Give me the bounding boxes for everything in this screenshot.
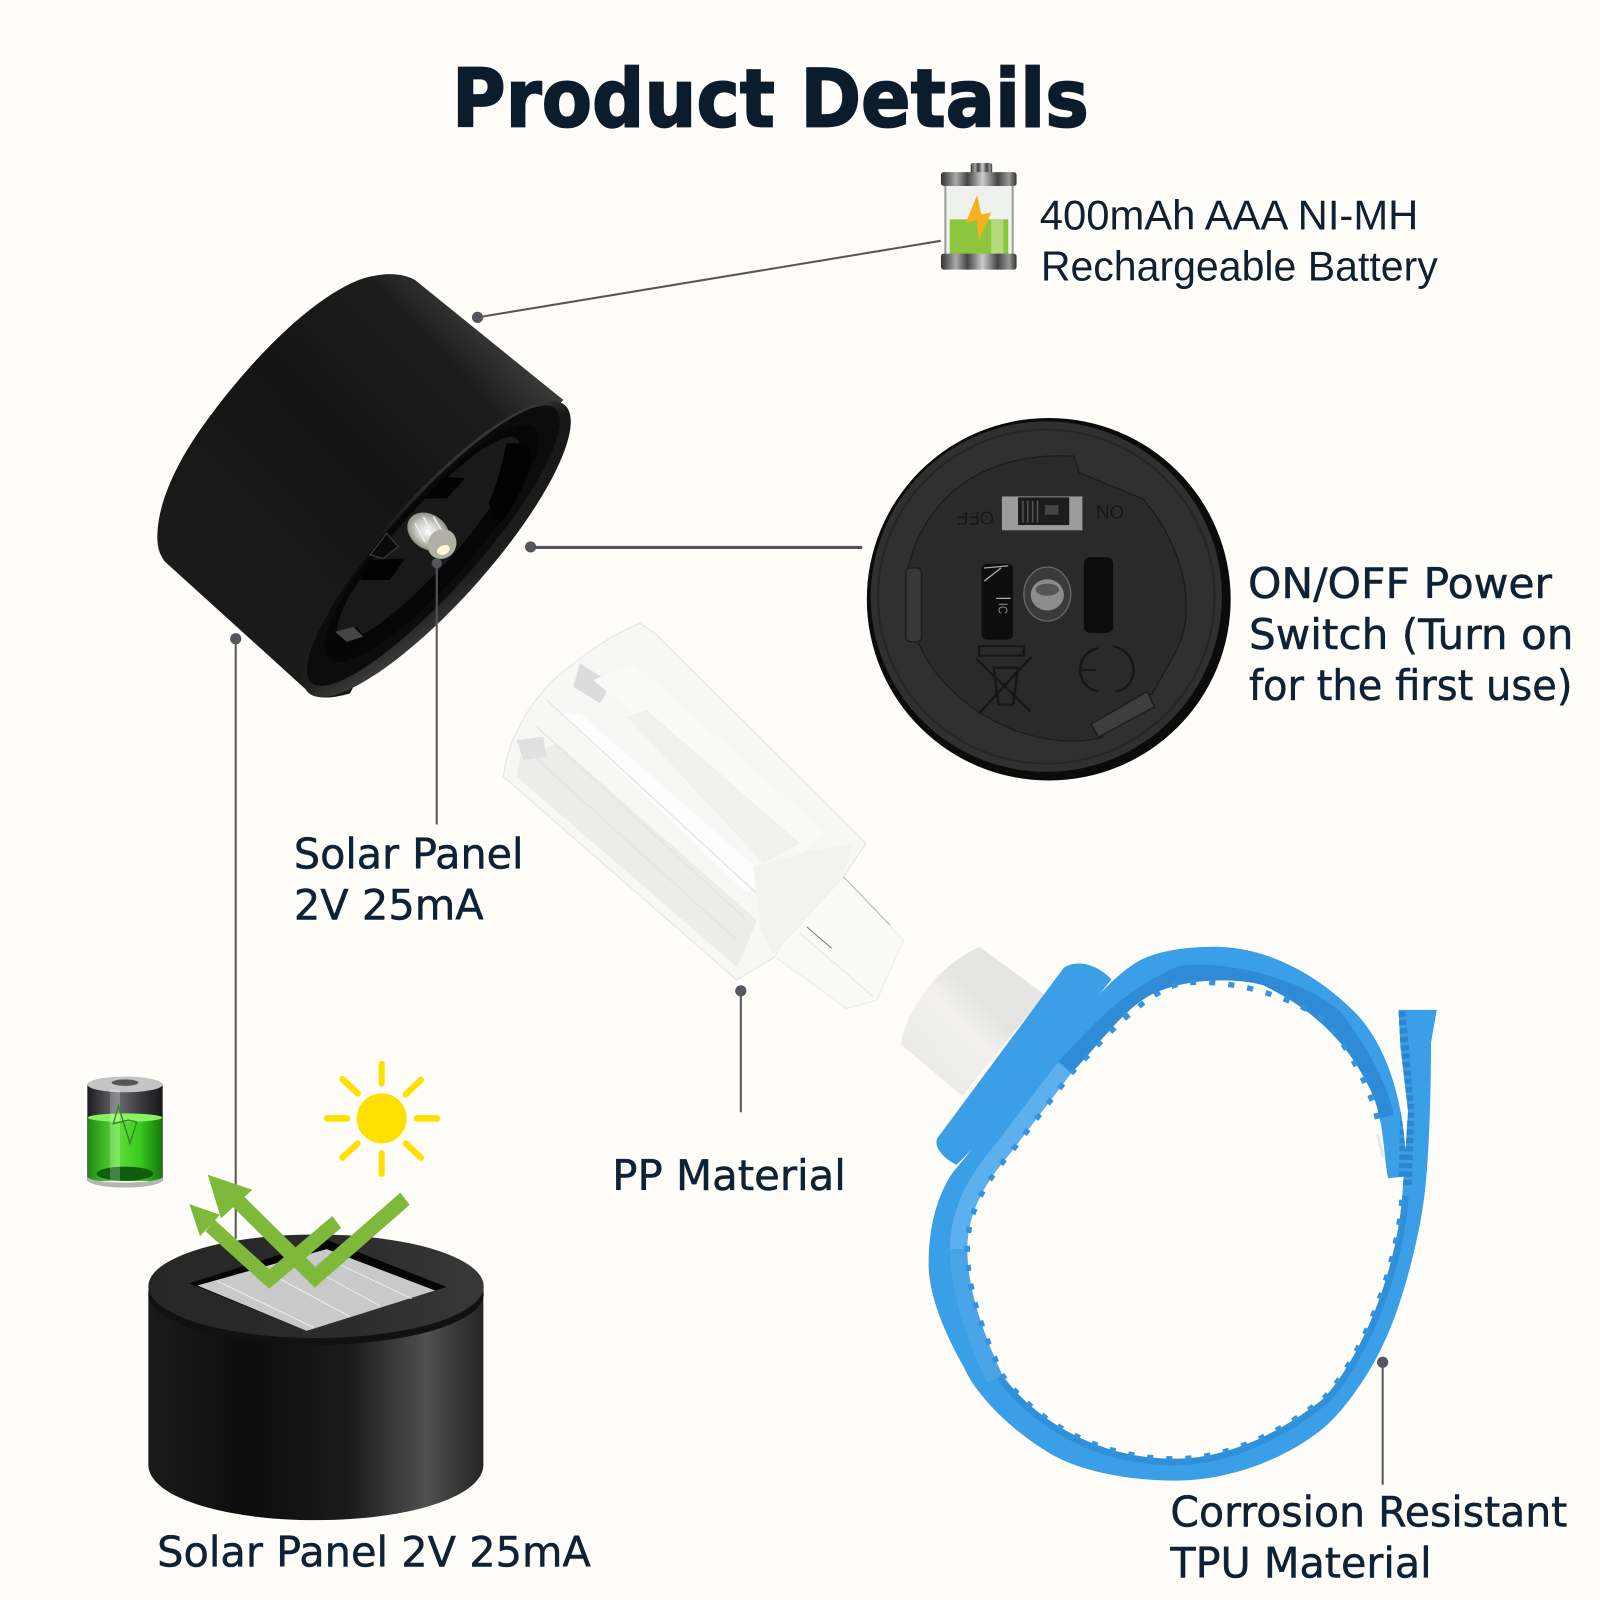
leader line: lower solar panel xyxy=(230,633,241,1239)
TPU material label: TPU Material xyxy=(1169,1539,1432,1588)
solar panel label, upper: 2V 25mA xyxy=(294,880,484,929)
leader line: LED solar panel label xyxy=(432,558,442,824)
icon: sun xyxy=(327,1064,437,1174)
title: Product Details xyxy=(452,53,1089,147)
TPU material label xyxy=(1169,1488,1567,1588)
lamp puck, angled view with LED xyxy=(157,274,604,728)
power switch label: for the first use) xyxy=(1249,661,1572,710)
leader line: power switch xyxy=(525,541,862,553)
power switch label: Switch (Turn on xyxy=(1249,610,1573,659)
switch disc, underside view xyxy=(867,418,1231,781)
power switch label: ON/OFF Power xyxy=(1248,559,1553,608)
battery label: 400mAh AAA NI-MH xyxy=(1040,192,1418,239)
TPU material label: Corrosion Resistant xyxy=(1170,1488,1567,1537)
clear PP stake xyxy=(503,623,903,1008)
solar lamp puck with panel xyxy=(148,1234,484,1520)
icon: green battery xyxy=(87,1077,163,1188)
reflected sunlight arrows xyxy=(189,1175,405,1279)
switch disc, underside view: IC xyxy=(995,603,1010,614)
battery label: Rechargeable Battery xyxy=(1041,243,1438,290)
switch disc, underside view: ON xyxy=(1096,502,1124,522)
solar panel label, upper xyxy=(294,829,523,929)
leader line: PP material xyxy=(735,985,746,1112)
switch disc, underside view: OFF xyxy=(957,508,994,528)
power switch label xyxy=(1248,559,1573,710)
blue TPU strap with white socket xyxy=(901,947,1437,1481)
solar panel label, upper: Solar Panel xyxy=(294,829,523,878)
battery label xyxy=(1040,192,1438,290)
solar panel label, lower: Solar Panel 2V 25mA xyxy=(157,1527,591,1576)
icon: charging battery xyxy=(941,163,1017,270)
PP material label: PP Material xyxy=(612,1151,846,1200)
leader line: battery callout xyxy=(472,241,941,323)
leader line: TPU material xyxy=(1377,1357,1388,1485)
